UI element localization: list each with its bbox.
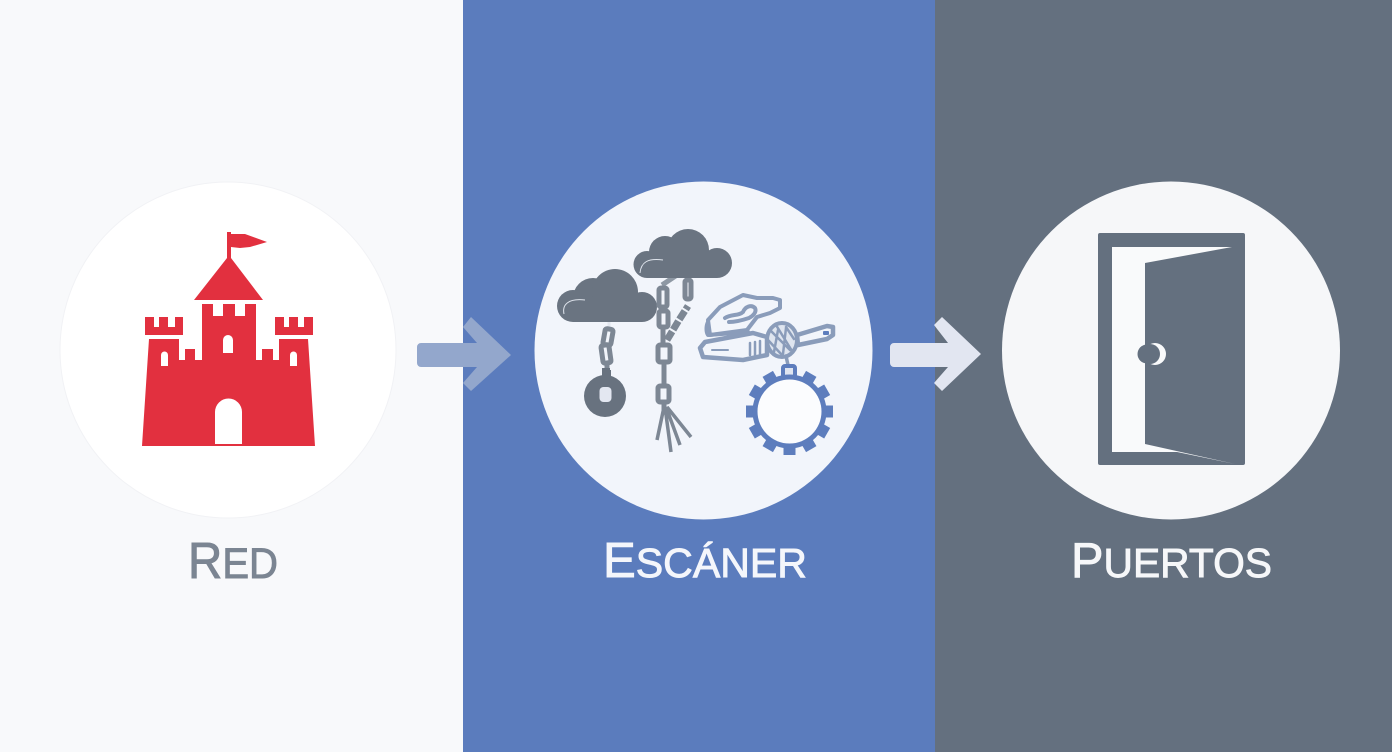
arrow: escáner to puertos	[890, 317, 981, 391]
icon: open door	[1098, 233, 1245, 465]
chain left with disc	[601, 322, 613, 374]
panel: puertos	[935, 0, 1392, 752]
label: escáner: ESCÁNER	[603, 534, 807, 588]
label: puertos: PUERTOS	[1071, 534, 1272, 588]
cloud right	[634, 229, 732, 278]
chain right with fraying end	[657, 275, 691, 452]
label: red: RED	[188, 532, 278, 589]
gear	[746, 366, 833, 455]
icon: clouds, chains, rope and gear	[557, 229, 833, 455]
panel: red	[0, 0, 463, 752]
panel: escáner	[463, 0, 935, 752]
rope and wrench outline	[700, 295, 833, 365]
cloud left	[557, 269, 657, 322]
icon circle: puertos	[1002, 182, 1340, 520]
icon: red castle	[142, 232, 315, 446]
icon circle: red	[60, 182, 396, 518]
icon circle: escáner	[534, 182, 872, 520]
arrow: red to escáner	[417, 317, 511, 391]
